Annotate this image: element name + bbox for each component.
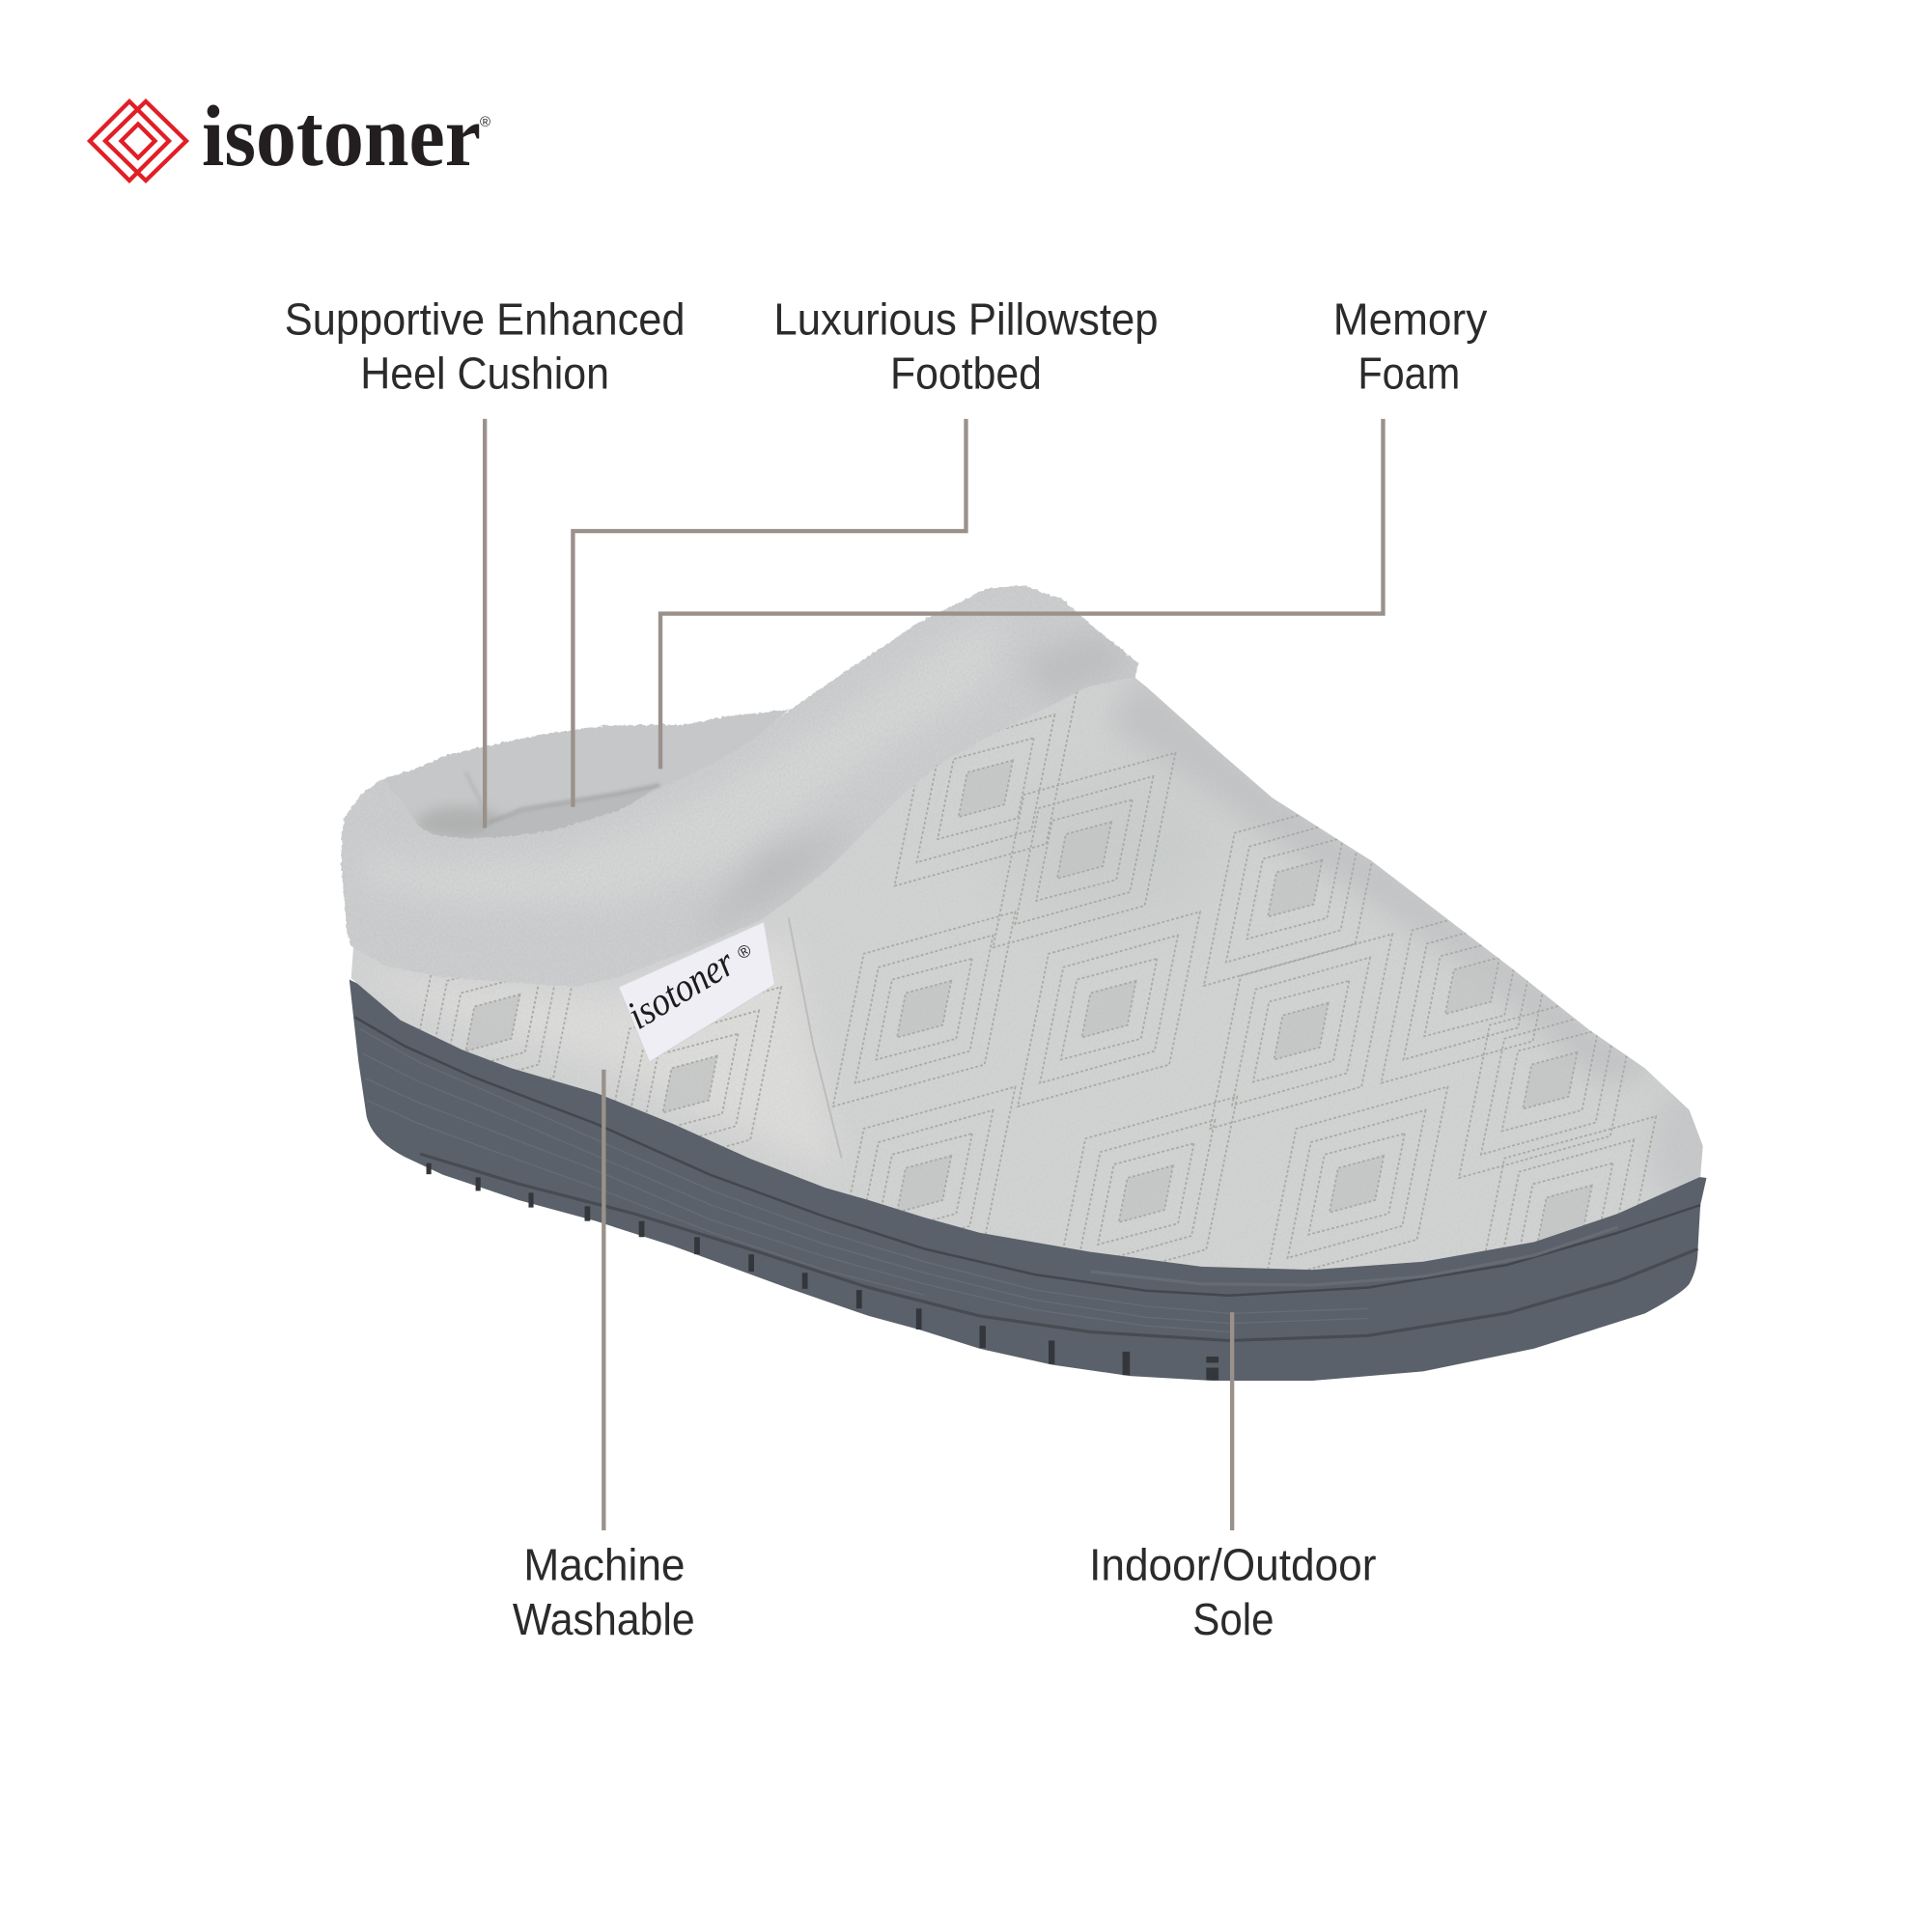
collar lining: inside	[383, 710, 789, 840]
lower groove	[420, 1154, 1698, 1340]
label: luxurious pillowstep footbed	[773, 294, 1159, 399]
wedge stripes	[360, 1029, 1368, 1332]
collar: plush rim	[341, 585, 1138, 987]
label text: isotoner	[620, 939, 742, 1038]
label: machine washable	[513, 1540, 695, 1644]
label registered mark: ®	[734, 940, 755, 964]
label: machine washable: Machine	[523, 1540, 686, 1590]
logo: isotoner	[90, 89, 490, 184]
label: supportive enhanced heel cushion: Heel Cushion	[360, 349, 609, 399]
label: memory foam: Foam	[1358, 349, 1460, 399]
diamond pattern	[402, 691, 1656, 1311]
tread notches	[427, 1163, 1218, 1380]
label: indoor/outdoor sole	[1089, 1540, 1376, 1644]
fabric texture	[333, 653, 1725, 1294]
rim seam	[355, 1017, 1700, 1296]
lining heel shadow	[416, 807, 505, 839]
footbed crease	[486, 785, 659, 825]
label: machine washable: Washable	[513, 1594, 695, 1644]
product image: slipper	[333, 579, 1725, 1381]
wordmark: isotoner	[202, 89, 481, 184]
label: luxurious pillowstep footbed: Luxurious Pillowstep	[773, 294, 1159, 344]
rim highlight	[1090, 1227, 1618, 1285]
callout line: memory foam	[660, 419, 1383, 769]
callout line: indoor/outdoor sole	[1230, 1312, 1234, 1530]
sole	[350, 980, 1706, 1381]
back seam line	[789, 918, 842, 1159]
label: indoor/outdoor sole: Sole	[1192, 1594, 1274, 1644]
label: supportive enhanced heel cushion	[285, 294, 686, 399]
callout line: heel cushion	[483, 419, 487, 828]
footbed	[486, 785, 659, 840]
woven label	[619, 922, 775, 1062]
callout lines	[485, 419, 1383, 1530]
upper shading	[1109, 672, 1664, 1084]
icon: red nested diamonds	[90, 101, 186, 181]
callout line: machine washable	[602, 1070, 605, 1530]
callout line: pillowstep footbed	[573, 419, 966, 807]
wordmark: ®	[480, 114, 490, 130]
label: memory foam: Memory	[1333, 294, 1487, 344]
label: supportive enhanced heel cushion: Supportive Enhanced	[285, 294, 686, 344]
label: indoor/outdoor sole: Indoor/Outdoor	[1089, 1540, 1376, 1590]
label: memory foam	[1333, 294, 1487, 399]
collar shading	[342, 592, 1137, 947]
upper: quilted fabric	[351, 678, 1703, 1271]
heel fold	[465, 772, 487, 823]
label: luxurious pillowstep footbed: Footbed	[890, 349, 1042, 399]
